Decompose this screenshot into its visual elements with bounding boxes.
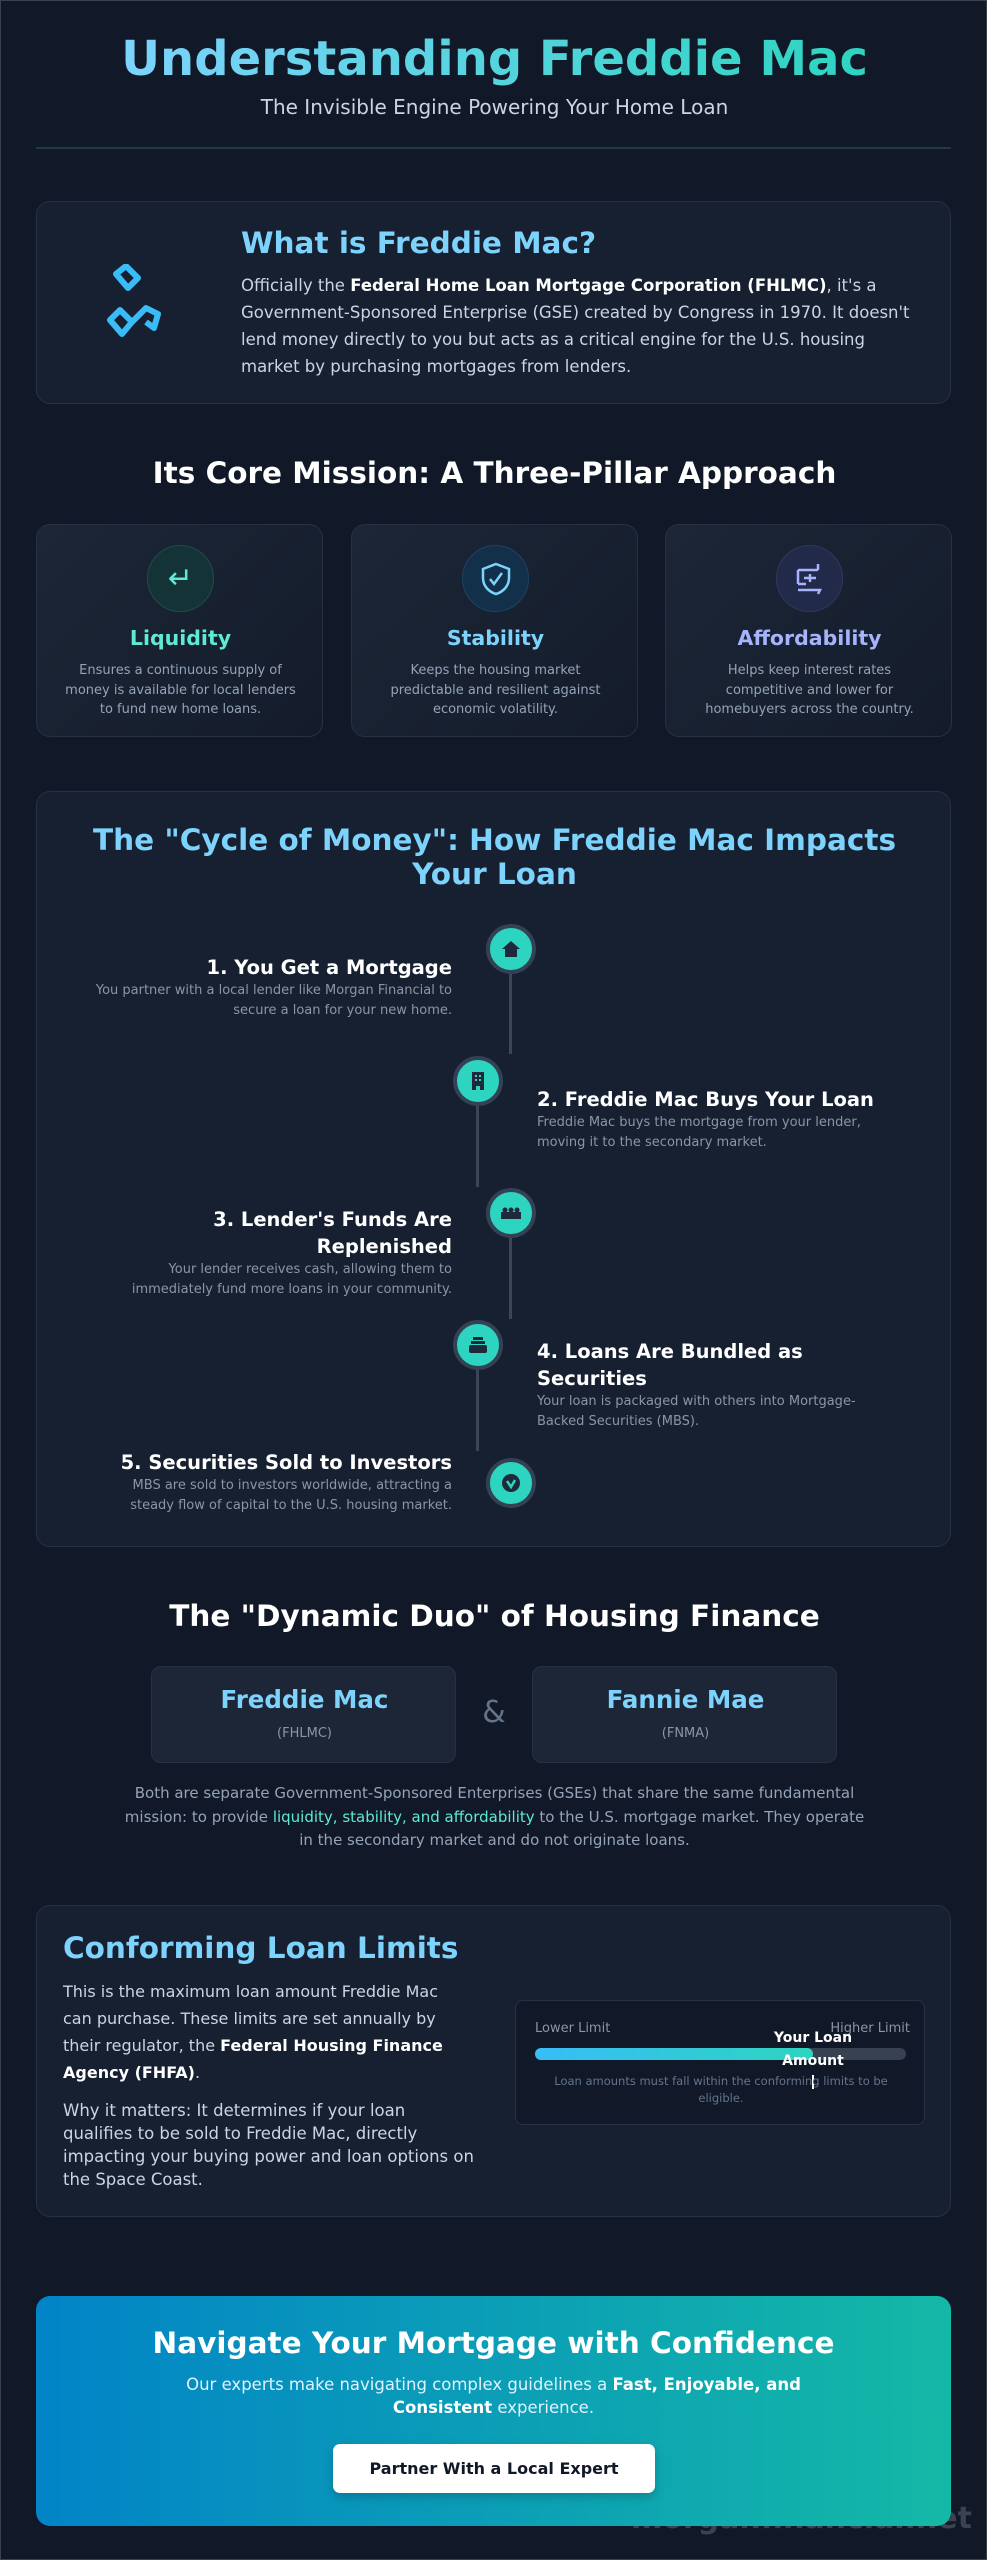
chart: loan limit bar: Higher Limit <box>830 2021 910 2036</box>
label: Stability <box>447 626 544 650</box>
body text: Government-Sponsored Enterprise (GSE) created by Congress in 1970. It doesn't <box>241 303 910 322</box>
card: freddie mac: Freddie Mac <box>221 1685 388 1714</box>
body text: Officially the Federal Home Loan Mortgage Corporation (FHLMC), it's a <box>241 276 877 295</box>
text: 4. Loans Are Bundled as <box>537 1340 803 1363</box>
chart: loan limit bar <box>515 2000 925 2125</box>
text: You partner with a local lender like Morgan Financial to secure a loan for your new home. <box>96 983 452 1018</box>
panel: conforming loan limits: the Space Coast. <box>63 2170 203 2189</box>
chart: loan limit bar: Your Loan Amount <box>774 2030 852 2069</box>
card: fannie mae: Fannie Mae <box>607 1685 764 1714</box>
text: MBS are sold to investors worldwide, attracting a steady flow of capital to the U.S. housing market. <box>130 1478 452 1513</box>
desc: Ensures a continuous supply of money is available for local lenders to fund new home loans. <box>65 663 296 717</box>
text: Your loan is packaged with others into Mortgage-Backed Securities (MBS). <box>537 1394 856 1429</box>
text <box>96 956 452 1018</box>
panel: affordability <box>665 524 952 737</box>
step 3 <box>132 1188 536 1297</box>
chart: loan limit bar: Lower Limit <box>535 2021 610 2036</box>
text <box>62 1982 443 2082</box>
text: their regulator, the Federal Housing Finance <box>63 2036 443 2055</box>
text: This is the maximum loan amount Freddie Mac <box>63 1982 438 2001</box>
step 1 <box>96 924 536 1018</box>
heading: dynamic duo: The "Dynamic Duo" of Housing Finance <box>169 1599 820 1633</box>
icon: liquidity <box>147 545 214 612</box>
text <box>537 1340 856 1429</box>
icon: liquidity: ↵ <box>168 561 193 596</box>
panel: cycle of money <box>36 791 951 1547</box>
text: Your lender receives cash, allowing them to immediately fund more loans in your community. <box>132 1262 452 1297</box>
icon: cash <box>486 1188 536 1238</box>
label: Liquidity <box>130 626 231 650</box>
text: Replenished <box>317 1235 452 1258</box>
icon: affordability <box>776 545 843 612</box>
heading: Navigate Your Mortgage with Confidence <box>153 2326 834 2360</box>
button: Partner With a Local Expert <box>369 2459 619 2478</box>
panel: call to action <box>36 2296 951 2526</box>
button <box>333 2444 655 2493</box>
body text <box>241 276 910 376</box>
text <box>132 1208 452 1297</box>
step 2 <box>453 1056 874 1150</box>
text: 2. Freddie Mac Buys Your Loan <box>537 1088 874 1111</box>
icon: building <box>453 1056 503 1106</box>
duo description: Both are separate Government-Sponsored Enterprises (GSEs) that share the same fundamental mission: to provide liquidity, stability, and affordability to the U.S. mortgage market. They operate in the secondary market and do not originate loans. <box>125 1784 864 1849</box>
label: Affordability <box>737 626 882 650</box>
text: Securities <box>537 1367 647 1390</box>
icon: home <box>486 924 536 974</box>
text: Agency (FHFA). <box>63 2063 200 2082</box>
step 5 <box>121 1451 536 1513</box>
panel: liquidity <box>36 524 323 737</box>
desc: Keeps the housing market predictable and resilient against economic volatility. <box>390 663 600 717</box>
heading: The "Cycle of Money": How Freddie Mac Impacts Your Loan <box>93 823 896 891</box>
card: fannie mae <box>532 1666 837 1763</box>
icon: link <box>107 264 161 337</box>
watermark: morganfinancial.net <box>631 2501 972 2536</box>
icon: investors <box>486 1458 536 1508</box>
text <box>537 1088 874 1150</box>
body text: market by purchasing mortgages from lenders. <box>241 357 631 376</box>
panel: conforming loan limits: qualifies to be sold to Freddie Mac, directly <box>63 2124 417 2143</box>
heading: What is Freddie Mac? <box>241 226 596 260</box>
card: freddie mac: (FHLMC) <box>277 1726 332 1741</box>
icon: bundle <box>453 1320 503 1370</box>
subtitle: The Invisible Engine Powering Your Home Loan <box>261 95 728 119</box>
text: 5. Securities Sold to Investors <box>121 1451 452 1474</box>
step 4 <box>453 1320 856 1429</box>
icon: shield <box>462 545 529 612</box>
text: Freddie Mac buys the mortgage from your lender, moving it to the secondary market. <box>537 1115 861 1150</box>
card: freddie mac <box>151 1666 456 1763</box>
panel: conforming loan limits: Why it matters: It determines if your loan <box>63 2101 405 2120</box>
chart: loan limit bar: Loan amounts must fall within the conforming limits to be eligible. <box>554 2074 888 2105</box>
text <box>121 1451 452 1513</box>
heading: Conforming Loan Limits <box>63 1931 458 1965</box>
text: 3. Lender's Funds Are <box>213 1208 452 1231</box>
text: can purchase. These limits are set annually by <box>63 2009 436 2028</box>
ampersand: & <box>482 1695 506 1730</box>
desc: Helps keep interest rates competitive and lower for homebuyers across the country. <box>705 663 914 717</box>
title: Understanding Freddie Mac <box>121 31 868 87</box>
text: Our experts make navigating complex guidelines a Fast, Enjoyable, and Consistent experience. <box>186 2375 801 2417</box>
card: fannie mae: (FNMA) <box>662 1726 709 1741</box>
text: 1. You Get a Mortgage <box>206 956 452 979</box>
panel: conforming loan limits <box>36 1905 951 2217</box>
body text: lend money directly to you but acts as a critical engine for the U.S. housing <box>241 330 865 349</box>
panel: conforming loan limits: impacting your buying power and loan options on <box>63 2147 474 2166</box>
panel: what is freddie mac <box>36 201 951 404</box>
panel: stability <box>351 524 638 737</box>
heading: core mission: Its Core Mission: A Three-Pillar Approach <box>153 456 836 490</box>
